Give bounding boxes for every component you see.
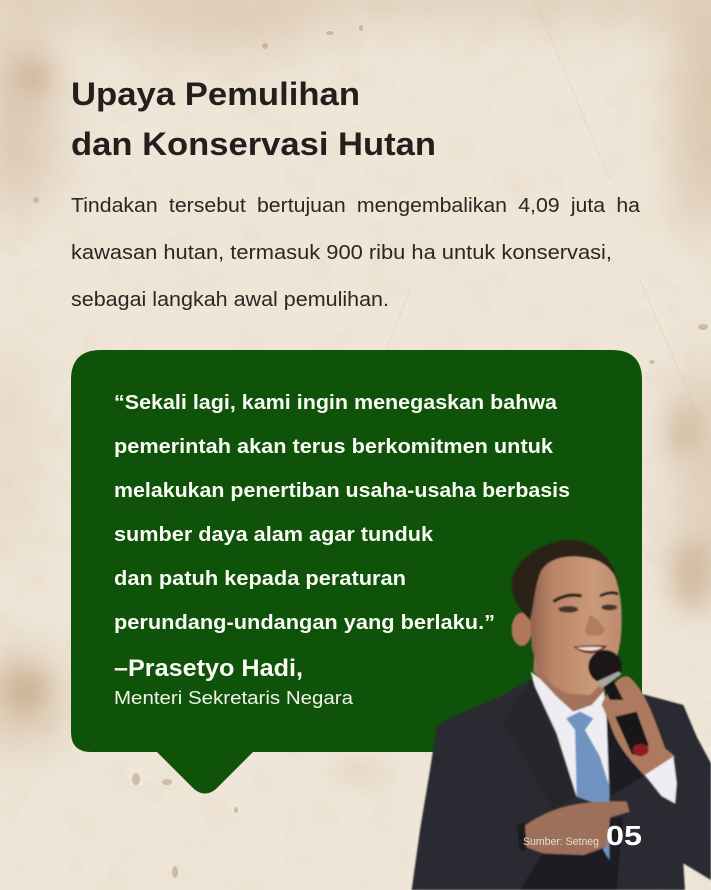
quote text: dan patuh kepada peraturan bbox=[114, 568, 406, 590]
shirt bbox=[531, 672, 609, 797]
shirt cuff bbox=[645, 757, 677, 803]
intro paragraph: kawasan hutan, termasuk 900 ribu ha untuk konservasi, bbox=[71, 242, 612, 264]
suit shading bbox=[503, 678, 577, 810]
microphone bbox=[603, 680, 649, 757]
watch strap bbox=[517, 823, 527, 852]
face bbox=[529, 550, 622, 695]
panel: quote speech bubble bbox=[71, 350, 642, 794]
palm and wrist bbox=[602, 676, 675, 778]
tie bbox=[566, 712, 609, 860]
intro paragraph: sebagai langkah awal pemulihan. bbox=[71, 289, 389, 311]
quote text: perundang-undangan yang berlaku.” bbox=[114, 612, 495, 634]
photo: speaker with microphone bbox=[412, 540, 711, 890]
title bbox=[71, 76, 436, 162]
title: Upaya Pemulihan bbox=[71, 76, 360, 112]
neck bbox=[533, 657, 607, 712]
quote text: pemerintah akan terus berkomitmen untuk bbox=[114, 436, 554, 458]
hair bbox=[512, 540, 619, 620]
quote text bbox=[114, 392, 570, 634]
suit bbox=[412, 678, 711, 890]
mouth bbox=[573, 645, 607, 653]
nose bbox=[585, 615, 605, 636]
source credit: Sumber: Setneg bbox=[523, 836, 599, 848]
quote text: sumber daya alam agar tunduk bbox=[114, 524, 434, 546]
eyes bbox=[558, 606, 578, 613]
intro paragraph bbox=[71, 195, 641, 311]
page number: 05 bbox=[606, 820, 642, 851]
title: dan Konservasi Hutan bbox=[71, 126, 436, 162]
quote text: “Sekali lagi, kami ingin menegaskan bahwa bbox=[114, 392, 558, 414]
brows bbox=[553, 595, 582, 602]
ear bbox=[512, 613, 532, 646]
quote text: melakukan penertiban usaha-usaha berbasis bbox=[114, 480, 570, 502]
intro paragraph: Tindakan tersebut bertujuan mengembalikan 4,09 juta ha bbox=[71, 195, 641, 217]
quote attribution name: –Prasetyo Hadi, bbox=[114, 655, 303, 682]
quote attribution role: Menteri Sekretaris Negara bbox=[114, 687, 354, 708]
lower hand bbox=[523, 801, 629, 855]
